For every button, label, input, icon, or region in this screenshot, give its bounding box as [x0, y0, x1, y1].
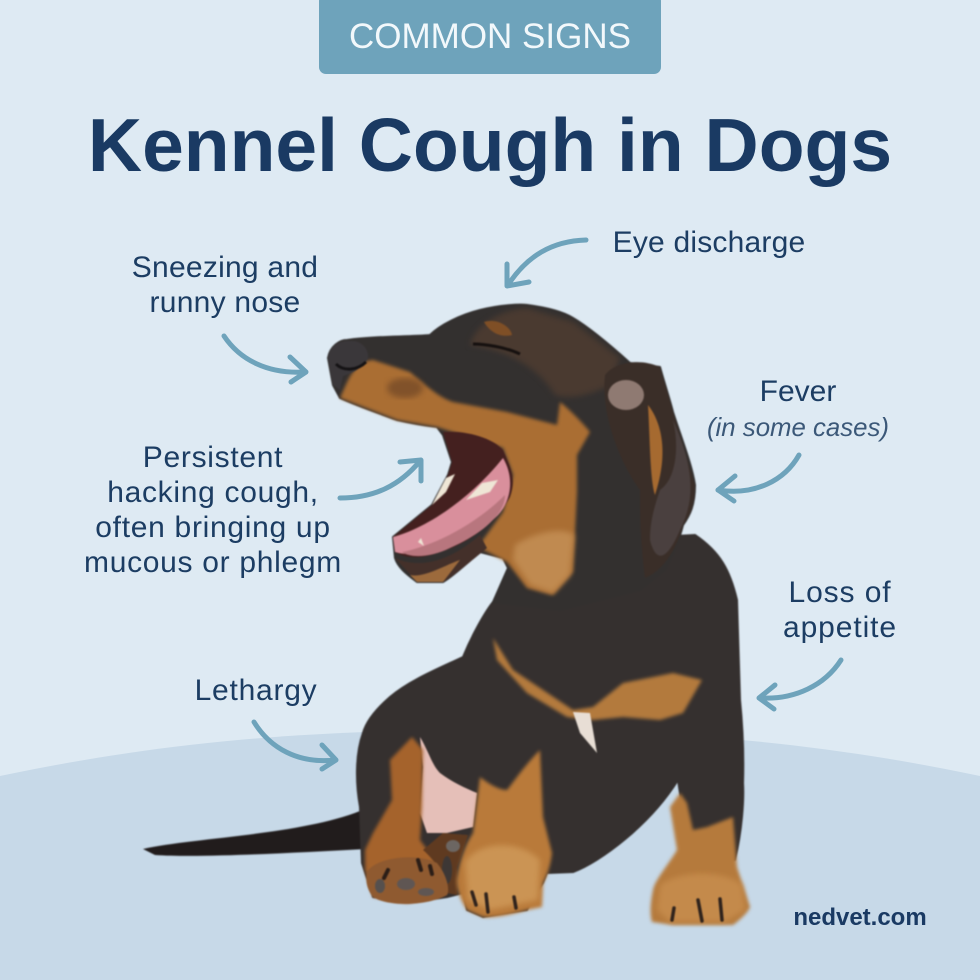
arrow: lethargy: [254, 722, 336, 769]
body: [357, 535, 743, 917]
teeth: [418, 474, 498, 546]
title: Kennel Cough in Dogs: [88, 103, 892, 187]
front paw light: [465, 845, 540, 910]
head and neck: [328, 305, 695, 610]
brown head top: [470, 308, 620, 397]
rear paw: [366, 857, 448, 904]
label: loss of appetite: Loss of: [788, 576, 892, 609]
mouth interior: [393, 432, 513, 557]
banner: common signs: [319, 0, 661, 74]
label: sneezing and runny nose: Sneezing and: [132, 251, 318, 284]
palate and tongue: [393, 458, 510, 556]
arrow: eye discharge: [507, 240, 586, 286]
lower jaw: [395, 535, 487, 582]
front leg tan: [457, 750, 552, 917]
right paw light: [657, 874, 745, 922]
eye closed: [473, 321, 520, 354]
label: sneezing and runny nose: [132, 251, 318, 319]
arrow: nose: [224, 336, 306, 382]
label: persistent hacking cough: mucous or phlegm: [84, 546, 342, 579]
label: fever: (in some cases): [707, 414, 889, 442]
right front leg tan: [651, 793, 750, 925]
label: fever: [707, 375, 889, 442]
muzzle darker spot: [387, 378, 423, 398]
chest tan: [493, 638, 702, 720]
label: fever: Fever: [760, 375, 836, 408]
ear: [604, 362, 695, 578]
arrow: fever: [718, 455, 799, 501]
neck light tan: [513, 531, 574, 593]
muzzle and cheek tan: [340, 360, 590, 595]
tail: [143, 811, 366, 856]
nose: [328, 341, 368, 390]
arrow: appetite: [759, 660, 841, 709]
label: loss of appetite: appetite: [783, 611, 897, 644]
label: loss of appetite: [783, 576, 897, 644]
second rear paw: [423, 833, 468, 895]
label: persistent hacking cough: often bringing up: [95, 511, 331, 544]
toes: [472, 892, 722, 921]
belly: [420, 737, 477, 833]
banner: common signs: COMMON SIGNS: [349, 17, 631, 56]
white chest tuft: [573, 712, 597, 753]
hind leg: [365, 737, 447, 903]
arrow: cough: [340, 460, 421, 498]
label: lethargy: Lethargy: [195, 674, 317, 707]
label: persistent hacking cough: [84, 441, 342, 579]
label: persistent hacking cough: Persistent: [143, 441, 283, 474]
website: nedvet.com: nedvet.com: [793, 904, 927, 931]
label: persistent hacking cough: hacking cough,: [107, 476, 319, 509]
label: sneezing and runny nose: runny nose: [150, 286, 300, 319]
label: eye discharge: Eye discharge: [613, 226, 805, 259]
